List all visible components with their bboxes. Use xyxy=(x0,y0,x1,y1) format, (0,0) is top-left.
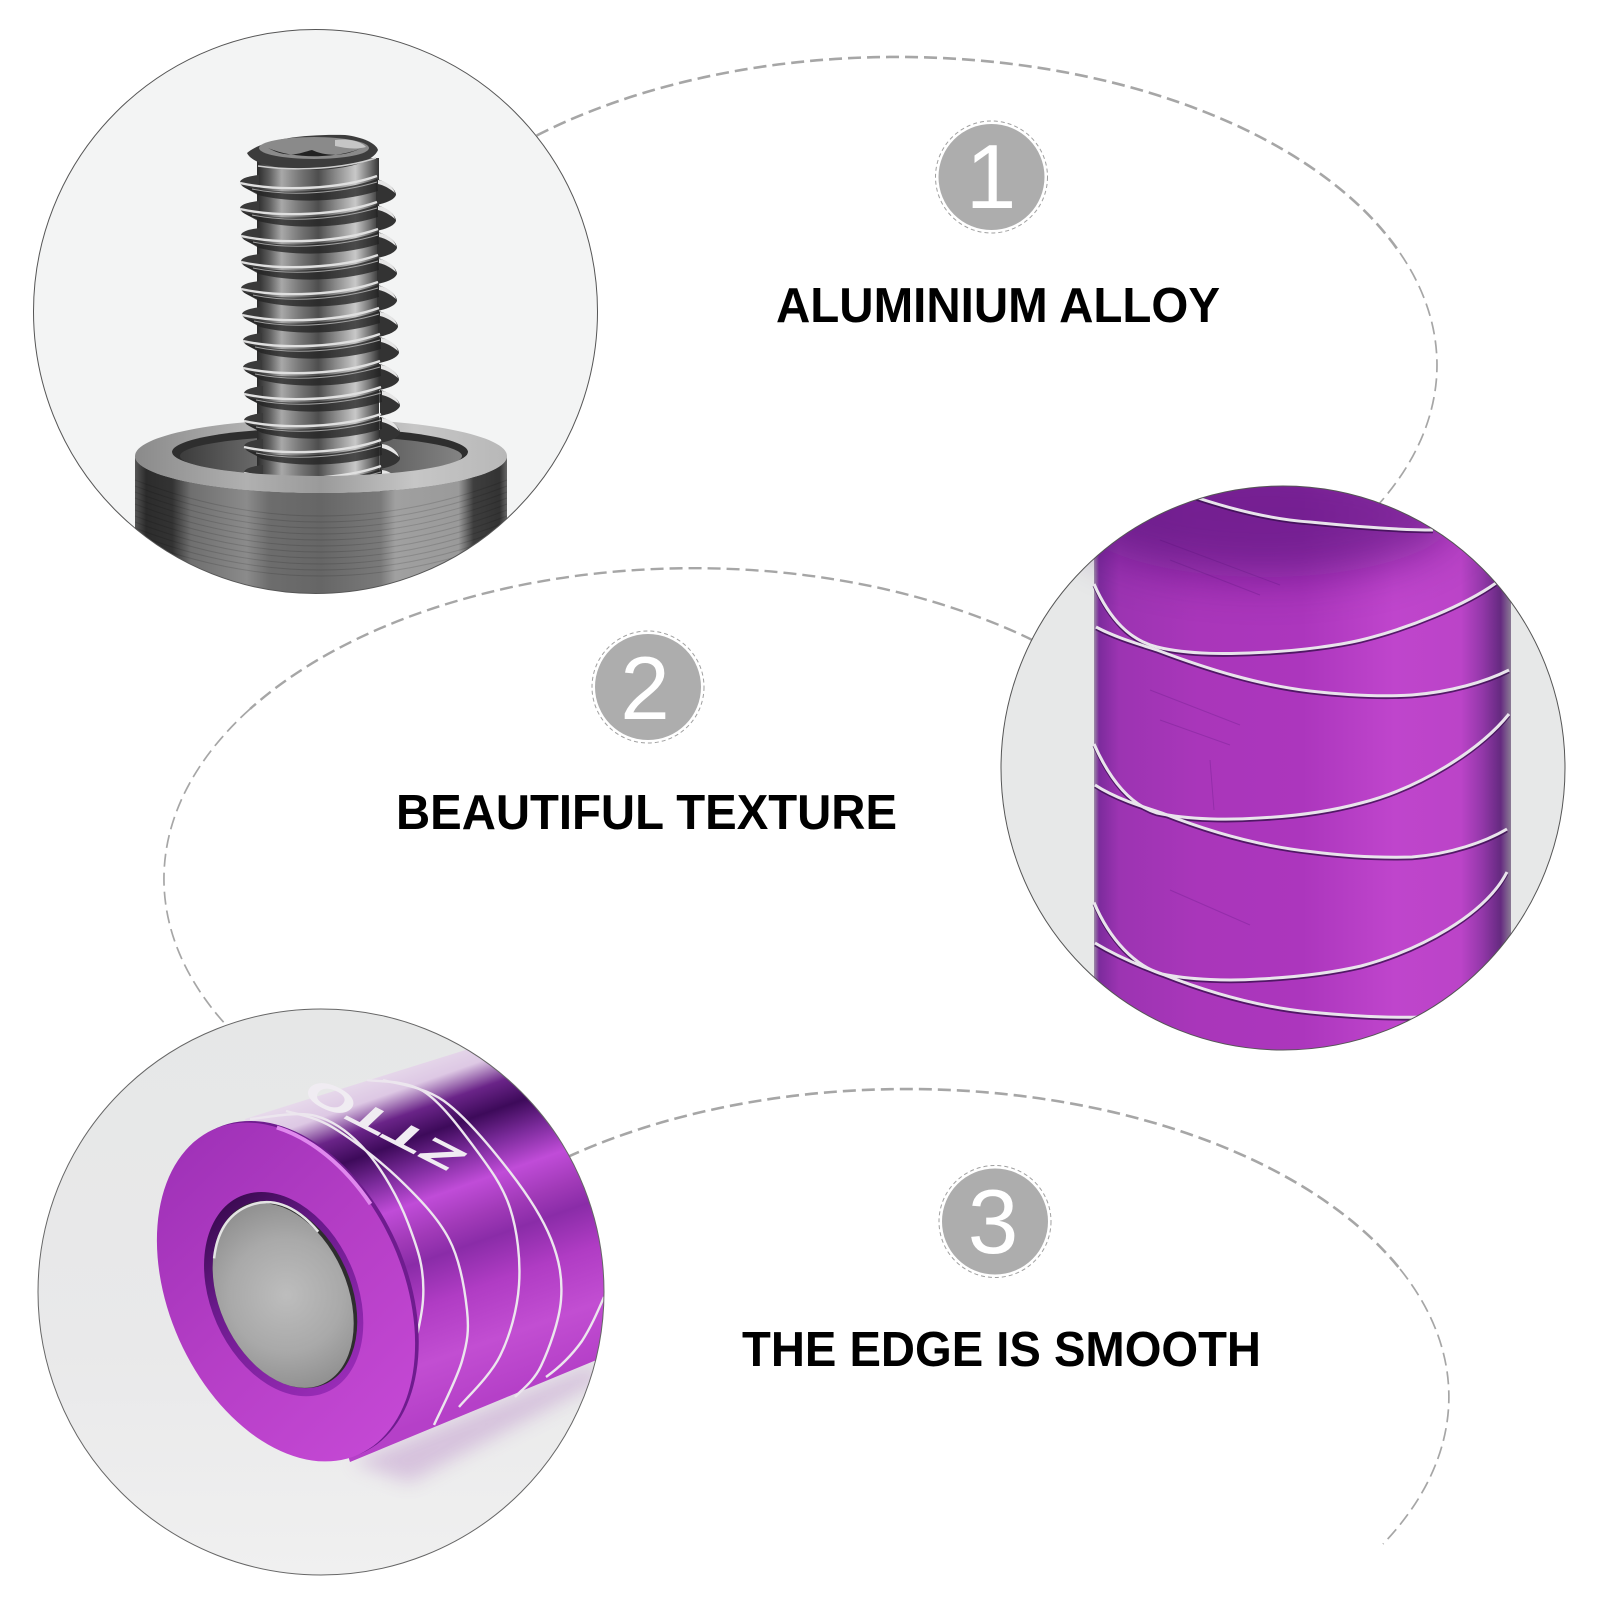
washer front lip xyxy=(135,452,507,493)
silver engraved lines xyxy=(1094,497,1509,1019)
washer recess xyxy=(135,419,507,493)
number badge 1: 1 xyxy=(966,127,1016,228)
dashed connector arc 2 xyxy=(164,568,1050,1039)
heading: the edge is smooth: THE EDGE IS SMOOTH xyxy=(742,1323,1261,1377)
number badge 3 xyxy=(939,1166,1051,1278)
panel: purple cylinder close-up xyxy=(1000,453,1566,1055)
cylinder body xyxy=(245,1050,604,1462)
dashed connector arc 3 xyxy=(550,1089,1449,1544)
bolt socket top xyxy=(247,135,378,170)
purple cylinder body xyxy=(1075,453,1511,1055)
end face xyxy=(156,1121,419,1462)
panel: cylinder end view xyxy=(38,1008,604,1576)
number badge 3: 3 xyxy=(968,1172,1018,1273)
number badge 1 xyxy=(936,121,1048,233)
washer body xyxy=(135,456,507,606)
silver rings xyxy=(250,1080,604,1425)
reflection on ground xyxy=(352,1366,605,1482)
number badge 2 xyxy=(592,631,704,743)
ZTTO logo: ZTTO xyxy=(300,1069,471,1183)
number badge 2: 2 xyxy=(620,638,670,738)
heading: beautiful texture: BEAUTIFUL TEXTURE xyxy=(396,786,897,840)
threaded bolt xyxy=(240,135,400,495)
heading: aluminium alloy: ALUMINIUM ALLOY xyxy=(776,279,1220,333)
dashed connector arc 1 xyxy=(520,57,1437,514)
panel: bolt photo xyxy=(30,25,600,606)
